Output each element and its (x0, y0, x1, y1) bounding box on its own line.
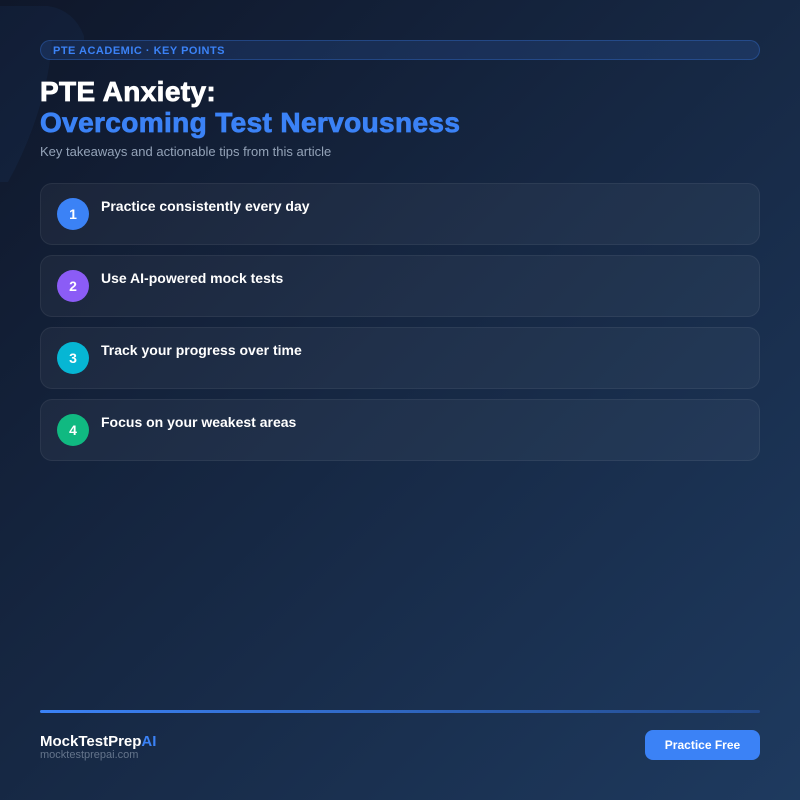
background blob (0, 6, 84, 182)
number 4: 4 (69, 422, 77, 438)
button: practice free (645, 730, 760, 760)
card: tip 1 (40, 183, 760, 245)
tip 3 text: Track your progress over time (101, 342, 302, 358)
subtitle: Key takeaways and actionable tips from this article (40, 144, 331, 159)
number 1 (57, 198, 89, 230)
number 3 (57, 342, 89, 374)
title (40, 76, 460, 138)
title: Overcoming Test Nervousness (40, 107, 460, 138)
card: tip 3 (40, 327, 760, 389)
button: practice free: Practice Free (665, 738, 740, 752)
badge: PTE Academic key points: PTE ACADEMIC · KEY POINTS (53, 45, 225, 57)
number 2 (57, 270, 89, 302)
tip 2 text: Use AI-powered mock tests (101, 270, 283, 286)
title: PTE Anxiety: (40, 76, 216, 107)
footer rule (40, 710, 760, 713)
card: tip 4 (40, 399, 760, 461)
number 3: 3 (69, 350, 77, 366)
number 1: 1 (69, 206, 77, 222)
brand name: MockTestPrepAI (40, 733, 156, 750)
brand url: mocktestprepai.com (40, 749, 138, 761)
tip 1 text: Practice consistently every day (101, 198, 310, 214)
number 2: 2 (69, 278, 77, 294)
tip 4 text: Focus on your weakest areas (101, 414, 296, 430)
card: tip 2 (40, 255, 760, 317)
number 4 (57, 414, 89, 446)
badge: PTE Academic key points (40, 40, 760, 60)
